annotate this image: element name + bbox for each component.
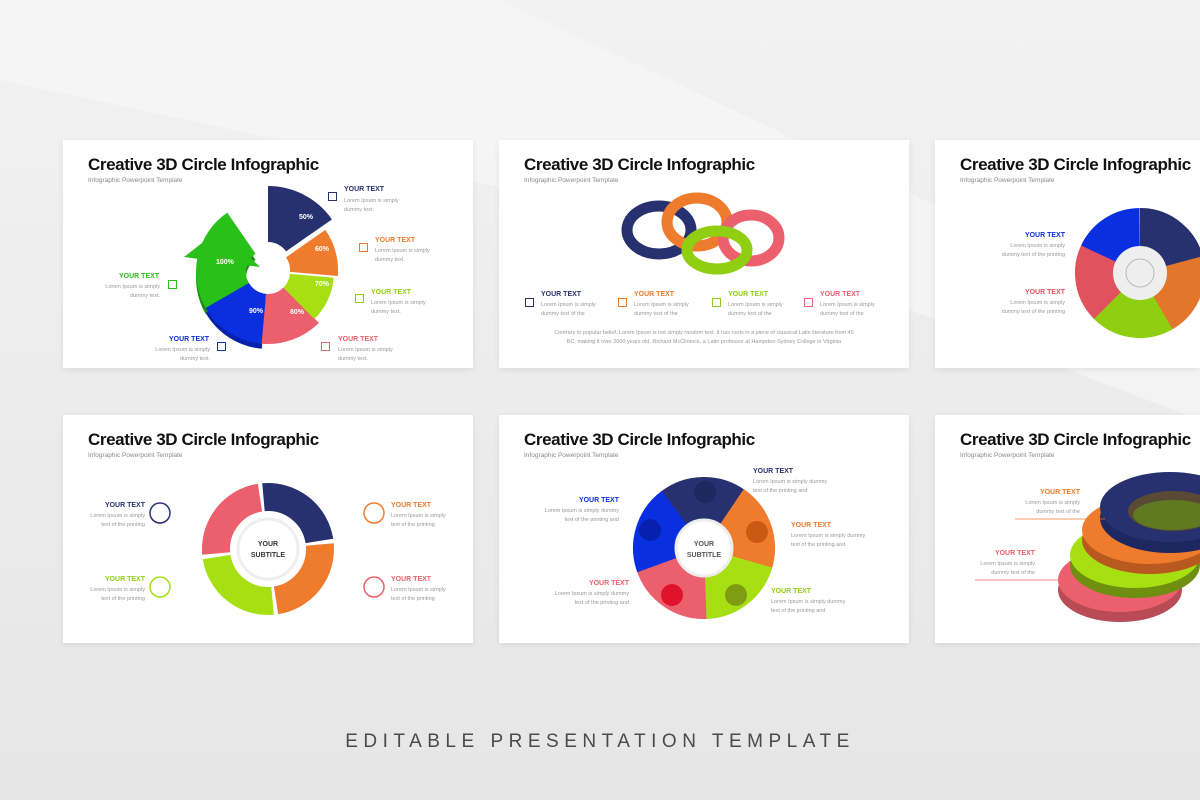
panel: card 3 wheel: YOUR TEXT — [1025, 232, 1065, 239]
panel: card 1 donut arrow: Lorem Ipsum is simply — [338, 347, 393, 353]
panel: card 1 donut arrow: Lorem Ipsum is simply — [155, 347, 210, 353]
panel: card 1 donut arrow — [63, 140, 473, 368]
panel: card 5 pentagon: Lorem Ipsum is simply dummy — [771, 599, 845, 605]
panel: card 5 pentagon: Lorem Ipsum is simply dummy — [753, 479, 827, 485]
chart: cycle: SUBTITLE — [251, 552, 285, 559]
panel: card 4 cycle arrows: YOUR TEXT — [105, 576, 145, 583]
panel: card 4 cycle arrows: YOUR TEXT — [391, 576, 431, 583]
panel: card 5 pentagon: Lorem Ipsum is simply dummy — [555, 591, 629, 597]
panel: card 5 pentagon: text of the printing and — [753, 488, 807, 494]
panel: card 5 pentagon: text of the printing and — [575, 600, 629, 606]
panel: card 2 chain: dummy text of the — [541, 311, 585, 317]
panel: card 4 cycle arrows: text of the printing — [391, 522, 435, 528]
chart: 3D donut: 70% — [315, 281, 330, 288]
panel: card 2 chain: Lorem Ipsum is simply — [728, 302, 783, 308]
panel: card 1 donut arrow: dummy text. — [338, 356, 368, 362]
panel: card 6 stacked rings: dummy text of the — [991, 570, 1035, 576]
panel: card 2 chain: Lorem Ipsum is simply — [820, 302, 875, 308]
chart: pentagon swirl: SUBTITLE — [687, 552, 721, 559]
panel: card 1 donut arrow: Lorem Ipsum is simply — [371, 300, 426, 306]
heading: Creative 3D Circle Infographic — [88, 155, 319, 174]
panel: card 1 donut arrow: YOUR TEXT — [169, 336, 209, 343]
chart: 3D donut — [184, 186, 338, 349]
panel: card 1 donut arrow: YOUR TEXT — [375, 237, 415, 244]
heading: Creative 3D Circle Infographic — [960, 430, 1191, 449]
subheading: Infographic Powerpoint Template — [960, 177, 1055, 184]
panel: card 1 donut arrow: dummy text. — [371, 309, 401, 315]
chart: chain rings — [622, 192, 784, 274]
footer caption: EDITABLE PRESENTATION TEMPLATE — [345, 731, 855, 752]
chart: 3D donut: 80% — [290, 309, 305, 316]
chart: pentagon swirl — [632, 477, 776, 619]
panel: card 6 stacked rings: YOUR TEXT — [1040, 489, 1080, 496]
panel: card 2 chain: dummy text of the — [634, 311, 678, 317]
panel: card 2 chain: YOUR TEXT — [541, 291, 581, 298]
panel: card 1 donut arrow: dummy text. — [344, 207, 374, 213]
panel: card 4 cycle arrows: text of the printing — [391, 596, 435, 602]
panel: card 5 pentagon: Lorem Ipsum is simply dummy — [545, 508, 619, 514]
chart: 3D donut: 50% — [299, 214, 314, 221]
panel: card 4 cycle arrows: YOUR TEXT — [105, 502, 145, 509]
panel: card 1 donut arrow: Lorem Ipsum is simply — [105, 284, 160, 290]
panel: card 4 cycle arrows — [63, 415, 473, 643]
panel: card 4 cycle arrows: text of the printing — [101, 522, 145, 528]
panel: card 1 donut arrow: YOUR TEXT — [344, 186, 384, 193]
panel: card 4 cycle arrows: Lorem Ipsum is simply — [391, 587, 446, 593]
chart: 3D donut: 60% — [315, 246, 330, 253]
panel: card 5 pentagon — [499, 415, 909, 643]
panel: card 3 wheel: YOUR TEXT — [1025, 289, 1065, 296]
panel: card 1 donut arrow: dummy text. — [180, 356, 210, 362]
panel: card 6 stacked rings: Lorem Ipsum is simply — [980, 561, 1035, 567]
panel: card 6 stacked rings — [935, 415, 1200, 643]
panel: card 5 pentagon: text of the printing and — [791, 542, 845, 548]
heading: Creative 3D Circle Infographic — [88, 430, 319, 449]
panel: card 2 chain — [499, 140, 909, 368]
chart: pentagon swirl: YOUR — [694, 541, 714, 548]
panel: card 5 pentagon: Lorem Ipsum is simply dummy — [791, 533, 865, 539]
panel: card 6 stacked rings: dummy text of the — [1036, 509, 1080, 515]
panel: card 1 donut arrow: Lorem Ipsum is simply — [375, 248, 430, 254]
panel: card 5 pentagon: YOUR TEXT — [791, 522, 831, 529]
paragraph: Contrary to popular belief, Lorem Ipsum is not simply random text. It has roots in a piece of classical Latin literature from 45 — [554, 330, 854, 336]
panel: card 1 donut arrow: YOUR TEXT — [371, 289, 411, 296]
panel: card 3 wheel: Lorem Ipsum is simply — [1010, 300, 1065, 306]
panel: card 5 pentagon: YOUR TEXT — [579, 497, 619, 504]
panel: card 2 chain: dummy text of the — [728, 311, 772, 317]
panel: card 2 chain: Lorem Ipsum is simply — [541, 302, 596, 308]
panel: card 5 pentagon: YOUR TEXT — [771, 588, 811, 595]
panel: card 2 chain: Lorem Ipsum is simply — [634, 302, 689, 308]
heading: Creative 3D Circle Infographic — [524, 430, 755, 449]
panel: card 4 cycle arrows: Lorem Ipsum is simply — [391, 513, 446, 519]
panel: card 4 cycle arrows: YOUR TEXT — [391, 502, 431, 509]
paragraph — [554, 330, 854, 345]
subheading: Infographic Powerpoint Template — [960, 452, 1055, 459]
panel: card 4 cycle arrows: Lorem Ipsum is simply — [90, 587, 145, 593]
panel: card 5 pentagon: text of the printing and — [565, 517, 619, 523]
subheading: Infographic Powerpoint Template — [524, 177, 619, 184]
panel: card 1 donut arrow: dummy text. — [130, 293, 160, 299]
panel: card 6 stacked rings: YOUR TEXT — [995, 550, 1035, 557]
panel: card 2 chain: dummy text of the — [820, 311, 864, 317]
heading: Creative 3D Circle Infographic — [960, 155, 1191, 174]
panel: card 5 pentagon: YOUR TEXT — [753, 468, 793, 475]
heading: Creative 3D Circle Infographic — [524, 155, 755, 174]
panel: card 4 cycle arrows: text of the printing — [101, 596, 145, 602]
panel: card 1 donut arrow: Lorem Ipsum is simply — [344, 198, 399, 204]
panel: card 3 wheel: dummy text of the printing — [1002, 309, 1065, 315]
panel: card 5 pentagon: text of the printing and — [771, 608, 825, 614]
subheading: Infographic Powerpoint Template — [524, 452, 619, 459]
panel: card 1 donut arrow: YOUR TEXT — [119, 273, 159, 280]
panel: card 4 cycle arrows: Lorem Ipsum is simply — [90, 513, 145, 519]
chart: 3D donut: 90% — [249, 308, 264, 315]
panel: card 6 stacked rings: Lorem Ipsum is simply — [1025, 500, 1080, 506]
chart: cycle: YOUR — [258, 541, 278, 548]
panel: card 5 pentagon: YOUR TEXT — [589, 580, 629, 587]
panel: card 3 wheel — [935, 140, 1200, 368]
panel: card 2 chain: YOUR TEXT — [728, 291, 768, 298]
subheading: Infographic Powerpoint Template — [88, 452, 183, 459]
paragraph: BC, making it over 2000 years old. Richard McClintock, a Latin professor at Hampden-Sydney College in Virginia — [567, 339, 841, 345]
panel: card 1 donut arrow: YOUR TEXT — [338, 336, 378, 343]
panel: card 2 chain: YOUR TEXT — [634, 291, 674, 298]
panel: card 1 donut arrow: dummy text. — [375, 257, 405, 263]
panel: card 3 wheel: Lorem Ipsum is simply — [1010, 243, 1065, 249]
panel: card 2 chain: YOUR TEXT — [820, 291, 860, 298]
chart: 3D donut: 100% — [216, 259, 235, 266]
chart: stacked rings — [975, 472, 1200, 622]
subheading: Infographic Powerpoint Template — [88, 177, 183, 184]
chart: wheel — [1075, 208, 1200, 338]
panel: card 3 wheel: dummy text of the printing — [1002, 252, 1065, 258]
chart: cycle — [149, 483, 385, 615]
